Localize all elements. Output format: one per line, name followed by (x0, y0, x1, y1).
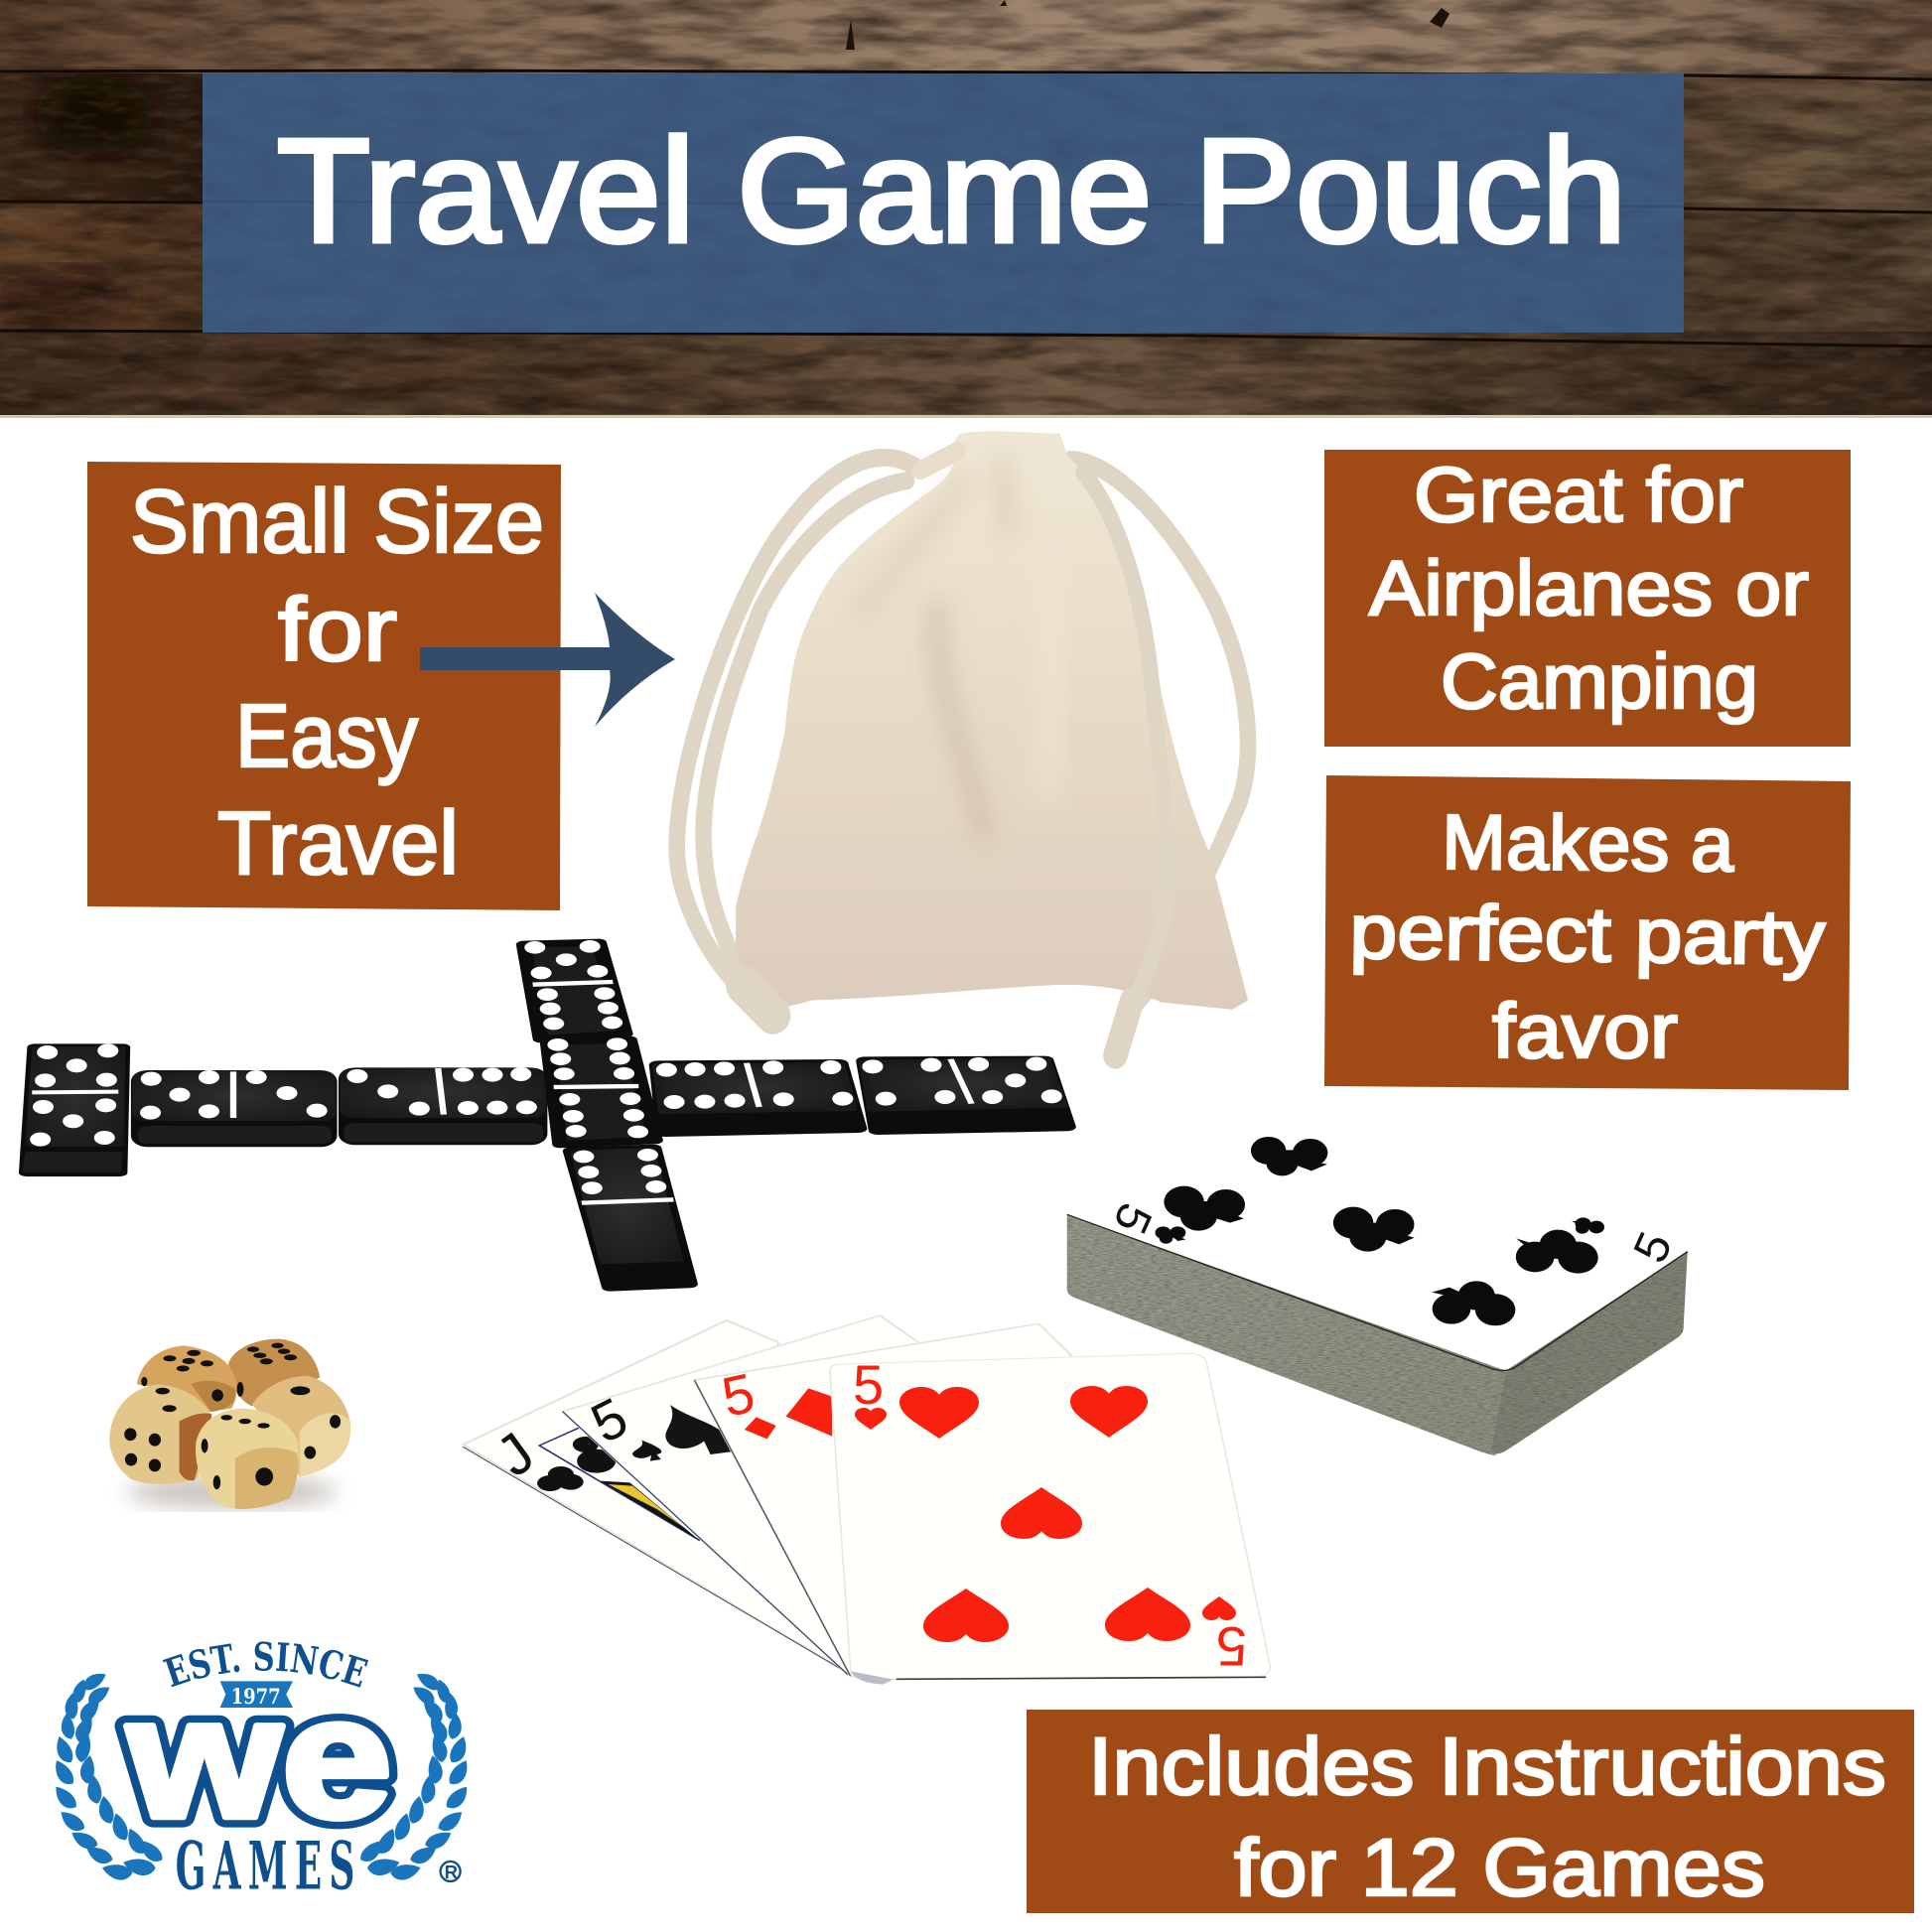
drawstring pouch (677, 431, 1248, 1055)
callout: airplanes or camping: Airplanes or (1369, 544, 1809, 631)
pouch body (736, 431, 1248, 1010)
callout: party favor: perfect party (1349, 888, 1826, 981)
die: right (252, 1376, 350, 1476)
card index letters: 5 (853, 1353, 884, 1416)
registered mark: R (445, 1862, 459, 1882)
logo GAMES text: GAMES (176, 1827, 362, 1905)
deck corner index: right: 5 (1624, 1225, 1683, 1271)
WE Games logo: EST. SINCE (163, 1641, 368, 1688)
callout: party favor: Makes a (1442, 798, 1734, 888)
laurel wreath (50, 1668, 474, 1882)
callout: airplanes or camping: Camping (1441, 637, 1758, 725)
card index letters: 5 (581, 1385, 637, 1454)
callout: instructions: Includes Instructions (1088, 1722, 1886, 1812)
domino: top vertical (524, 940, 625, 1039)
domino: left vertical (25, 1043, 125, 1173)
card: five of diamonds (694, 1323, 1071, 1678)
card: jack of clubs (463, 1320, 878, 1676)
domino: four-five (862, 1057, 1067, 1131)
wooden dice (109, 1339, 350, 1509)
logo 1977 ribbon: 1977 (231, 1685, 281, 1710)
card: five of spades (563, 1315, 917, 1676)
card index letters (484, 1353, 1247, 1678)
logo arc text (171, 1670, 360, 1688)
arrow (420, 593, 675, 727)
card deck (1067, 1100, 1688, 1455)
callout: airplanes or camping (1324, 450, 1851, 747)
dominoes (25, 940, 1067, 1288)
callout: small size: Easy (235, 687, 418, 786)
fanned playing cards (463, 1315, 1270, 1685)
callout: small size: Travel (217, 794, 459, 894)
card index letters: 5 (717, 1361, 759, 1429)
callout: airplanes or camping: Great for (1414, 451, 1743, 538)
pouch folds (860, 456, 1051, 843)
WE Games logo (56, 1641, 467, 1905)
domino: lower vertical (570, 1148, 689, 1288)
title banner (203, 73, 1684, 333)
die: back right (228, 1339, 320, 1406)
logo wordmark: we (126, 1661, 392, 1854)
wood plank header (0, 0, 1932, 418)
deck corner index: left: 5 (1103, 1195, 1162, 1241)
registered mark (441, 1862, 461, 1882)
title text: Travel Game Pouch (277, 109, 1626, 273)
domino: six-four (656, 1060, 858, 1133)
pouch cords (744, 451, 1167, 1055)
callout: party favor (1324, 775, 1851, 1090)
callout: instructions: for 12 Games (1234, 1823, 1765, 1913)
die: left front (109, 1384, 212, 1484)
callout: instructions (1027, 1710, 1914, 1913)
deck sides (1067, 1214, 1688, 1455)
callout: small size: for (278, 581, 397, 680)
logo wordmark: we (126, 1661, 392, 1854)
callout: small size (87, 462, 561, 910)
card: five of hearts (830, 1353, 1270, 1685)
die: front (196, 1409, 298, 1509)
deck clubs (1156, 1137, 1604, 1325)
callout: small size: Small Size (130, 473, 544, 572)
die: back left (137, 1345, 237, 1412)
domino: five-three (131, 1070, 338, 1147)
card index letters: J (484, 1420, 546, 1489)
callout: party favor: favor (1492, 987, 1678, 1074)
domino: centre vertical (547, 1037, 655, 1145)
hearts (855, 1386, 1236, 1642)
card index letters: 5 (1216, 1615, 1247, 1678)
domino: three-six (339, 1067, 547, 1145)
deck top face (1067, 1100, 1688, 1369)
